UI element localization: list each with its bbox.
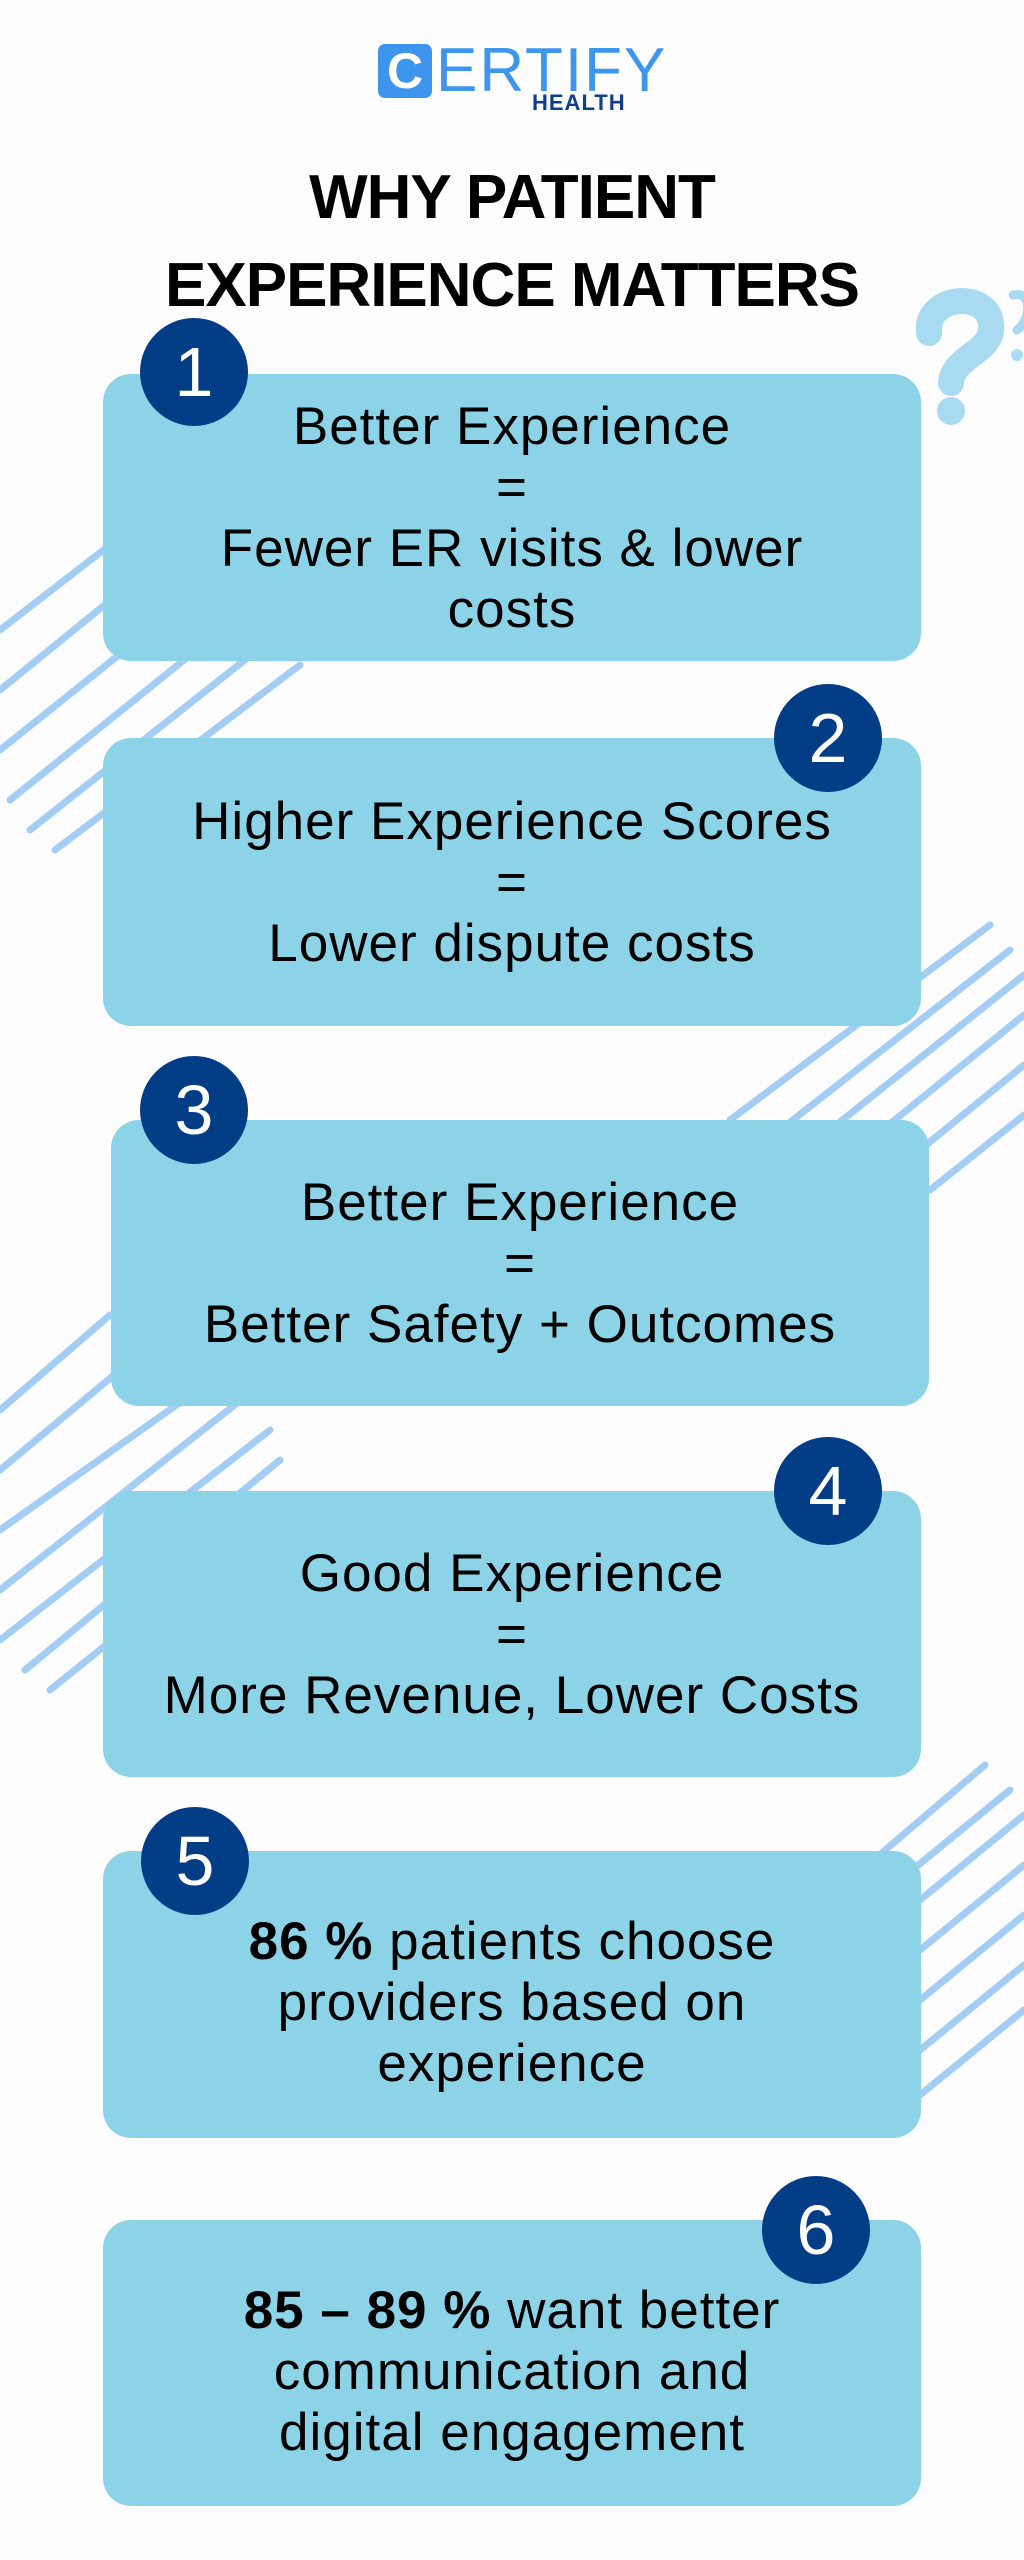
logo subtitle: HEALTH xyxy=(532,90,626,115)
badge 2: 2 xyxy=(809,699,847,777)
logo C square xyxy=(378,44,432,98)
badge 1 xyxy=(140,318,248,426)
panel 2: Higher Experience Scores xyxy=(192,792,832,850)
panel 1: Better Experience xyxy=(293,396,731,456)
logo C square: C xyxy=(387,43,423,99)
logo xyxy=(378,36,667,115)
panel 3: Better Safety + Outcomes xyxy=(204,1294,836,1354)
panel 5: 86 % patients choose xyxy=(249,1912,775,1971)
logo wordmark: ERTIFY xyxy=(436,36,667,105)
panel 6: communication and xyxy=(274,2342,750,2400)
panel 5: experience xyxy=(377,2034,647,2093)
icon: question mark xyxy=(916,288,1024,425)
panel 6: digital engagement xyxy=(279,2402,745,2462)
panel 1: = xyxy=(496,458,528,516)
panel 1: Fewer ER visits & lower xyxy=(221,518,803,578)
panel 6 xyxy=(103,2220,921,2506)
panel 2: = xyxy=(496,852,528,912)
panel 5: providers based on xyxy=(278,1973,746,2032)
title: WHY PATIENT xyxy=(309,163,715,232)
badge 5: 5 xyxy=(176,1822,214,1900)
title xyxy=(165,163,859,320)
panel 2: Lower dispute costs xyxy=(268,914,756,972)
panel 1: costs xyxy=(448,580,576,638)
panel 4: Good Experience xyxy=(300,1544,724,1602)
badge 3 xyxy=(140,1056,248,1164)
panel 4: More Revenue, Lower Costs xyxy=(164,1666,860,1724)
badge 6: 6 xyxy=(797,2191,835,2269)
panel 3: = xyxy=(504,1234,536,1292)
panel 4 xyxy=(103,1491,921,1777)
badge 2 xyxy=(774,684,882,792)
panel 3: Better Experience xyxy=(301,1172,739,1232)
panel 5 xyxy=(103,1851,921,2138)
panel 1 xyxy=(103,374,921,661)
panel 3 xyxy=(111,1120,929,1406)
badge 6 xyxy=(762,2176,870,2284)
badge 4 xyxy=(774,1437,882,1545)
panel 6: 85 – 89 % want better xyxy=(244,2280,780,2340)
badge 4: 4 xyxy=(809,1452,847,1530)
badge 1: 1 xyxy=(175,333,213,411)
badge 3: 3 xyxy=(175,1071,213,1149)
badge 5 xyxy=(141,1807,249,1915)
panel 2 xyxy=(103,738,921,1026)
panel 4: = xyxy=(496,1604,528,1664)
title: EXPERIENCE MATTERS xyxy=(165,251,859,320)
